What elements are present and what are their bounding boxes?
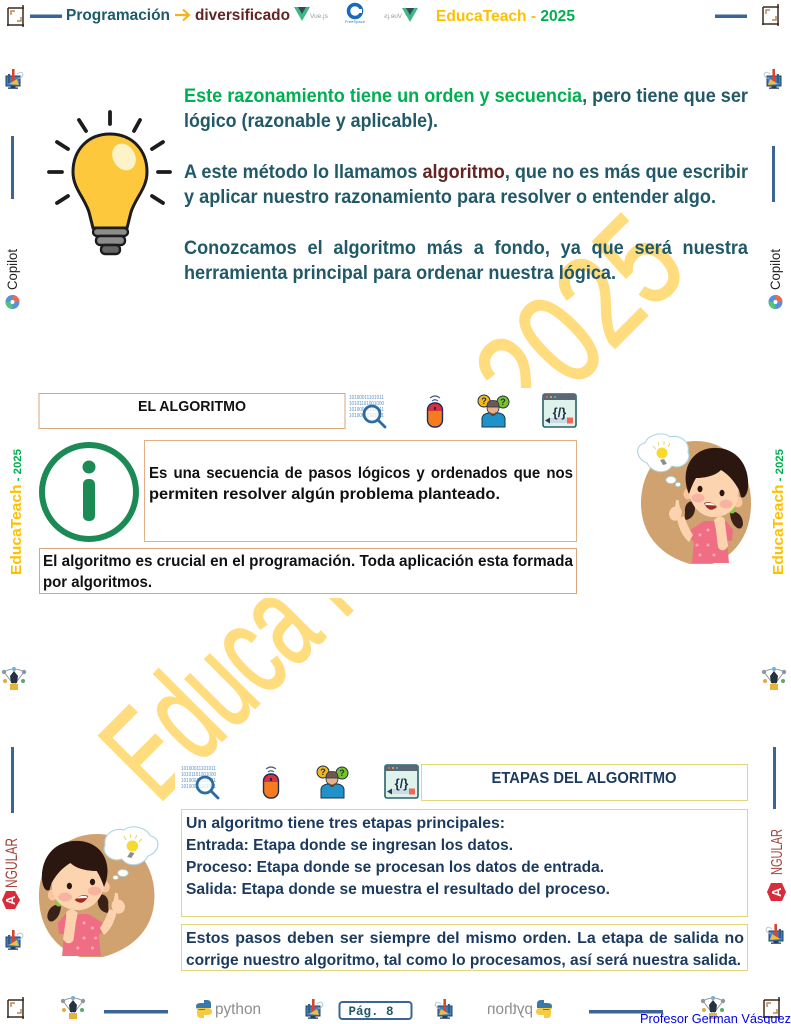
definition box: permiten resolver algún problema planteado. [149, 486, 500, 503]
icon: binary search lower: 10101101001000 [181, 772, 216, 778]
illustration: girl thinking left [39, 827, 158, 957]
side label: Copilot right: Copilot [767, 249, 783, 290]
icon: vue logo mirrored [383, 8, 418, 22]
icon: binary search lower: 10100011101011 [181, 778, 216, 784]
icon: binary search lower [181, 766, 218, 798]
watermark: Educa [74, 552, 346, 825]
note box: por algoritmos. [43, 574, 152, 591]
side label: Copilot left [4, 249, 20, 309]
icon: vue logo mirrored: Vue.js [383, 13, 402, 20]
watermark: 2025 [447, 188, 711, 451]
icon: thinking person lower: ? [339, 768, 345, 778]
footer python logo left: python [215, 1001, 261, 1018]
footer python logo right mirrored [487, 1000, 552, 1018]
definition box [144, 440, 576, 542]
icon: light bulb [49, 112, 170, 254]
paragraph 2: y aplicar nuestro razonamiento para resolver o entender algo. [184, 187, 716, 208]
icon: binary search [349, 395, 385, 427]
header [66, 7, 575, 25]
order note box [182, 924, 748, 970]
icon: C logo: FreeSpace [345, 20, 365, 24]
icon: monitor top right [764, 69, 781, 89]
side label: Angular left [2, 838, 21, 909]
note box [40, 548, 576, 594]
definition box: Es una secuencia de pasos lógicos y ordenados que nos [149, 465, 573, 482]
icon: pen tool left [2, 667, 26, 690]
heading: Etapas del algoritmo [422, 764, 748, 800]
icon: C logo [345, 4, 365, 24]
icon: monitor footer right [435, 999, 452, 1019]
corner icon top right [762, 4, 779, 26]
paragraph 2: A este método lo llamamos algoritmo, que no es más que escribir [184, 162, 749, 183]
icon: thinking person lower: ? [320, 767, 326, 777]
icon: code window [543, 394, 576, 427]
side label: Angular right [767, 829, 786, 901]
icon: monitor lower left [6, 930, 23, 950]
icon: pen tool right [762, 667, 786, 690]
order note box: corrige nuestro algoritmo, tal como lo procesamos, así será nuestra salida. [186, 952, 741, 969]
header title: Programación: Programación [66, 7, 170, 24]
side label: Angular right: NGULAR [769, 829, 786, 875]
corner icon bottom left [7, 997, 24, 1019]
icon: pen tool footer right [701, 996, 725, 1019]
paragraph 1: lógico (razonable y aplicable). [184, 111, 438, 132]
stages box: Proceso: Etapa donde se procesan los datos de entrada. [186, 859, 604, 876]
side label: Angular left: NGULAR [2, 838, 21, 888]
icon: code window: {/} [553, 405, 566, 420]
illustration: girl thinking right [638, 434, 751, 564]
corner icon bottom right [763, 997, 780, 1019]
note box: El algoritmo es crucial en el programación. Toda aplicación esta formada [43, 553, 573, 570]
order note box: Estos pasos deben ser siempre del mismo orden. La etapa de salida no [186, 930, 744, 947]
side label: Copilot left: Copilot [4, 249, 20, 290]
paragraph 3: Conozcamos el algoritmo más a fondo, ya que será nuestra [184, 238, 748, 259]
paragraph 3 [184, 238, 748, 284]
watermark: Teach - [248, 352, 546, 651]
icon: monitor footer left [306, 999, 323, 1019]
icon: code window lower [385, 765, 418, 798]
paragraph 2 [184, 162, 749, 208]
icon: mouse [428, 396, 442, 427]
footer python logo right mirrored: python [487, 1001, 533, 1018]
paragraph 3: herramienta principal para ordenar nuestra lógica. [184, 263, 616, 284]
side label: Angular left: A [3, 895, 18, 905]
page number [340, 1002, 412, 1019]
icon: pen tool footer left [61, 996, 85, 1019]
side label: Copilot right [767, 249, 783, 309]
side label: EducaTeach right: EducaTeach - 2025 [770, 449, 787, 575]
stages box: Un algoritmo tiene tres etapas principales: [186, 815, 505, 832]
icon: binary search: 10101101001000 [349, 401, 384, 407]
icon: monitor lower right [766, 924, 783, 944]
heading: El algoritmo [39, 394, 345, 428]
paragraph 1 [184, 86, 749, 132]
icon: vue logo [294, 7, 329, 21]
stages box [182, 810, 748, 916]
icon: information [42, 445, 136, 539]
paragraph 1: Este razonamiento tiene un orden y secuencia, pero tiene que ser [184, 86, 749, 107]
corner icon top left [7, 5, 24, 27]
icon: thinking person: ? [481, 396, 487, 406]
intro text [184, 86, 749, 284]
stages box: Salida: Etapa donde se muestra el resultado del proceso. [186, 881, 610, 898]
arrow [175, 10, 189, 20]
side label: EducaTeach left: EducaTeach - 2025 [8, 449, 25, 575]
icon: code window lower: {/} [395, 776, 408, 791]
stages box: Entrada: Etapa donde se ingresan los datos. [186, 837, 513, 854]
icon: thinking person [478, 395, 509, 427]
header title: diversificado: diversificado [195, 7, 290, 24]
icon: binary search: 10100011101011 [349, 395, 384, 401]
footer python logo left [196, 1000, 261, 1018]
icon: binary search lower: 10100011101011 [181, 766, 216, 772]
heading: Etapas del algoritmo: ETAPAS DEL ALGORITMO [492, 770, 676, 787]
icon: thinking person lower [317, 766, 348, 798]
side label: Angular right: A [769, 887, 784, 897]
header brand: EducaTeach - 2025 [436, 8, 575, 25]
icon: vue logo: Vue.js [310, 13, 329, 20]
icon: thinking person: ? [500, 397, 506, 407]
icon: binary search lower: 10100011101011 [181, 784, 216, 790]
icon: binary search: 10100011101011 [349, 413, 384, 419]
page number: Pág. 8 [348, 1005, 394, 1019]
icon: monitor top left [6, 69, 23, 89]
icon: binary search: 10100011101011 [349, 407, 384, 413]
heading: El algoritmo: EL ALGORITMO [138, 398, 246, 415]
icon: mouse lower [264, 767, 278, 798]
